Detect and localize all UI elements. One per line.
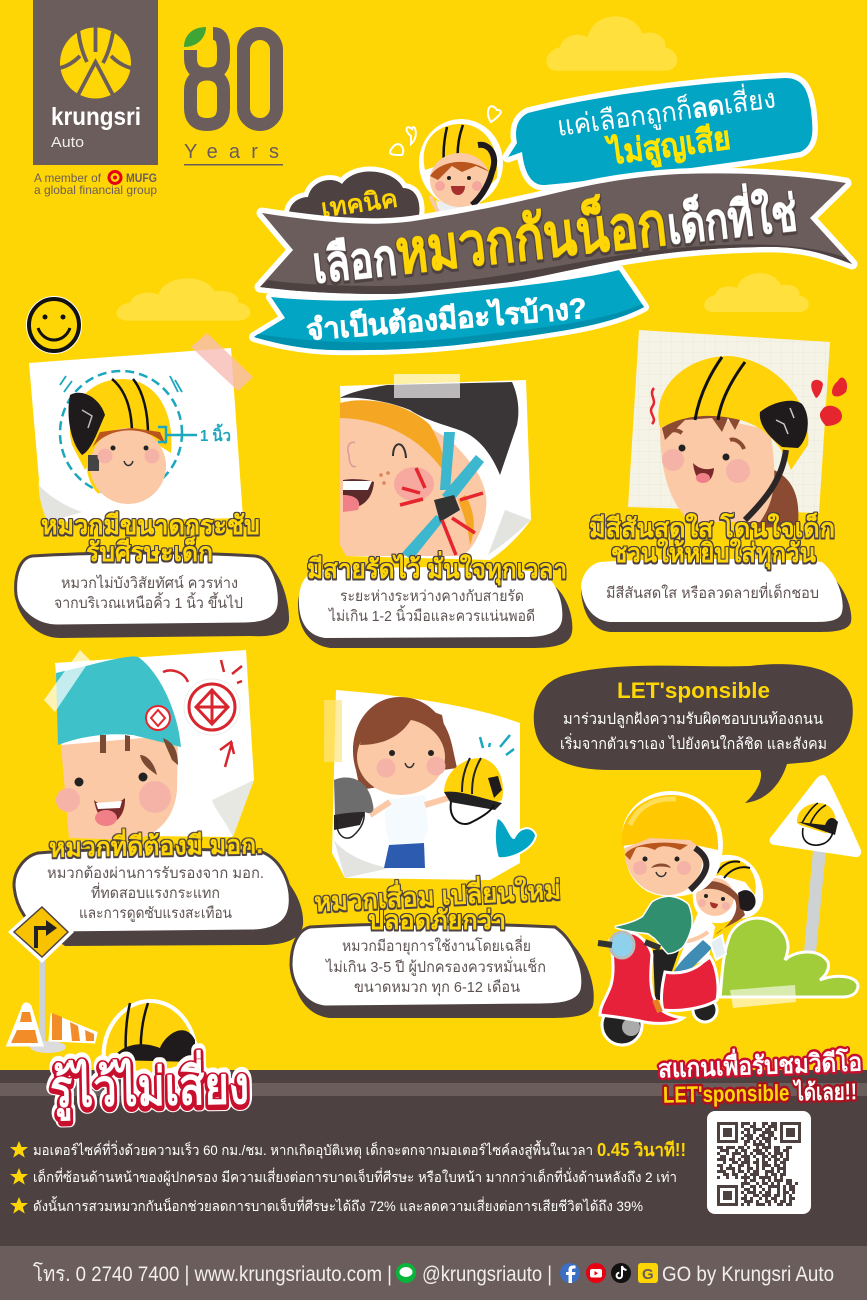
title ribbon: what is needed: จำเป็นต้องมีอะไรบ้าง? xyxy=(305,290,588,347)
title ribbon: what is needed xyxy=(254,270,644,350)
speech bubble: LET'sponsible: มาร่วมปลูกฝังความรับผิดชอบบนท้องถนน xyxy=(563,711,823,729)
logo: krungsri auto: krungsri xyxy=(51,103,141,131)
bush xyxy=(720,918,858,1008)
road sign: right turn xyxy=(8,901,74,1045)
illustration: parent and child on scooter xyxy=(598,791,763,1045)
heading xyxy=(313,871,562,935)
icon: smiley xyxy=(26,296,82,354)
heading: ชวนให้หยิบใส่ทุกวัน xyxy=(611,538,816,570)
text box with shadow: และการดูดซับแรงสะเทือน xyxy=(79,905,232,922)
bullet 2: เด็กที่ซ้อนด้านหน้าของผู้ปกครอง มีความเสี่ยงต่อการบาดเจ็บที่ศีรษะ หรือใบหน้า มากกว่าเด็กที่นั่งด้านหลังถึง 2 เท่า xyxy=(33,1168,677,1186)
text box with shadow xyxy=(291,924,594,1018)
heading: มีสายรัดไว้ มั่นใจทุกเวลา xyxy=(307,550,567,586)
illustration: paper with kid measuring helmet xyxy=(29,333,253,522)
logo: 80 years: Years xyxy=(184,141,279,163)
icon: helmet behind know-no-risk heading xyxy=(102,999,199,1090)
heading: รับศีรษะเด็ก xyxy=(86,536,213,567)
text box with shadow xyxy=(16,553,289,638)
text box with shadow xyxy=(581,559,851,632)
heading: ปลอดภัยกว่า xyxy=(368,905,506,935)
heading: scan to watch: LET'sponsible ได้เลย!! xyxy=(663,1077,857,1108)
illustration: paper with kid measuring helmet: 1 นิ้ว xyxy=(200,423,231,445)
heading: มีสีสันสดใส โดนใจเด็ก xyxy=(589,512,835,543)
icon: kid with helmet xyxy=(419,119,503,222)
text box with shadow: หมวกไม่บังวิสัยทัศน์ ควรห่าง xyxy=(61,574,238,592)
text box with shadow xyxy=(14,849,303,946)
icon: hearts xyxy=(390,106,501,155)
heading: know no risk: รู้ไว้ไม่เสี่ยง xyxy=(49,1051,250,1124)
icon: GO app xyxy=(638,1263,658,1283)
heading: หมวกที่ดีต้องมี มอก. xyxy=(49,825,263,863)
footer contact bar xyxy=(0,1246,867,1300)
panel: helmet fits the head xyxy=(16,333,289,638)
bottom dark band xyxy=(0,1070,867,1246)
title ribbon: choose the right kids helmet xyxy=(260,173,852,296)
heading: scan to watch xyxy=(657,1044,862,1108)
heading xyxy=(589,512,835,570)
text box with shadow: หมวกต้องผ่านการรับรองจาก มอก. xyxy=(47,865,264,882)
title ribbon: choose the right kids helmet: เลือก xyxy=(310,231,399,294)
heading: know no risk: รู้ไว้ไม่เสี่ยง xyxy=(49,1049,250,1122)
panel: strap always fastened xyxy=(298,374,572,648)
panel: bright colours xyxy=(581,330,851,632)
text box with shadow: ไม่เกิน 1-2 นิ้วมือและควรแน่นพอดี xyxy=(328,605,535,625)
parent figure xyxy=(615,791,723,1000)
road sign: triangle with helmet xyxy=(770,775,861,952)
text box with shadow: มีสีสันสดใส หรือลวดลายที่เด็กชอบ xyxy=(606,582,819,602)
bullet 1: 0.45 วินาที!! xyxy=(597,1140,686,1160)
text box with shadow: หมวกมีอายุการใช้งานโดยเฉลี่ย xyxy=(342,935,531,956)
heading: know no risk xyxy=(49,1049,250,1124)
icon: YouTube xyxy=(586,1263,606,1283)
text box with shadow: ระยะห่างระหว่างคางกับสายรัด xyxy=(340,588,524,605)
title ribbon: choose the right kids helmet: หมวกกันน็อก xyxy=(392,187,670,286)
logo: krungsri auto: a global financial group xyxy=(34,183,157,197)
text box with shadow: ไม่เกิน 3-5 ปี ผู้ปกครองควรหมั่นเช็ก xyxy=(325,956,546,976)
bullet 3: ดังนั้นการสวมหมวกกันน็อกช่วยลดการบาดเจ็บที่ศีรษะได้ถึง 72% และลดความเสี่ยงต่อการเสียชีวิตได้ถึง 39% xyxy=(33,1196,643,1214)
illustration: paper with kid and TIS badge xyxy=(44,650,254,840)
illustration: paper with woman holding helmets xyxy=(324,690,536,880)
heading: หมวกมีขนาดกระชับ xyxy=(41,510,260,540)
icon: GO app: G xyxy=(642,1266,654,1283)
icon: LINE xyxy=(396,1263,416,1283)
heading: หมวกเสื่อม เปลี่ยนใหม่ xyxy=(313,871,562,917)
QR code xyxy=(707,1111,811,1214)
text box with shadow xyxy=(298,567,572,648)
logo: 80 years xyxy=(184,27,283,166)
text box with shadow: ที่ทดสอบแรงกระแทก xyxy=(91,882,220,902)
logo: krungsri auto xyxy=(33,0,158,197)
footer contact bar: โทร. 0 2740 7400 | www.krungsriauto.com | xyxy=(33,1262,392,1286)
speech bubble: LET'sponsible: เริ่มจากตัวเราเอง ไปยังคนใกล้ชิด และสังคม xyxy=(560,733,827,753)
child figure xyxy=(673,855,763,978)
traffic cones xyxy=(8,1004,96,1053)
panel: replace worn helmet xyxy=(291,690,594,1018)
illustration: paper with strap close-up xyxy=(340,374,531,560)
illustration: paper with smiling kid xyxy=(628,330,847,530)
panel: TIS certified helmet xyxy=(14,650,303,946)
icon: Facebook xyxy=(560,1263,580,1283)
bullets: risk facts xyxy=(10,1140,686,1214)
text box with shadow: ขนาดหมวก ทุก 6-12 เดือน xyxy=(354,979,520,997)
clouds xyxy=(117,16,809,321)
bullet 1: มอเตอร์ไซค์ที่วิ่งด้วยความเร็ว 60 กม./ชม. หากเกิดอุบัติเหตุ เด็กจะตกจากมอเตอร์ไซค์ลงสู่พื้นในเวลา xyxy=(33,1140,593,1159)
icon: TikTok xyxy=(611,1263,631,1283)
heading bubble: choose right, reduce risk: ไม่สูญเสีย xyxy=(604,119,733,175)
heading: know no risk: รู้ไว้ไม่เสี่ยง xyxy=(49,1049,250,1122)
heading bubble: choose right, reduce risk xyxy=(508,78,812,185)
title ribbon: choose the right kids helmet: เด็กที่ใช่ xyxy=(664,178,800,254)
heading bubble: choose right, reduce risk: แค่เลือกถูกก็ลดเสี่ยง xyxy=(555,79,778,143)
speech bubble: LET'sponsible xyxy=(534,664,853,803)
footer contact bar: GO by Krungsri Auto xyxy=(662,1263,834,1286)
logo: krungsri auto: MUFG xyxy=(126,171,157,185)
title: technique cloud tag xyxy=(289,172,419,228)
text box with shadow: จากบริเวณเหนือคิ้ว 1 นิ้ว ขึ้นไป xyxy=(54,592,243,612)
logo: krungsri auto: Auto xyxy=(51,134,84,151)
footer contact bar: @krungsriauto | xyxy=(422,1263,552,1286)
heading xyxy=(41,510,260,567)
scooter xyxy=(598,932,718,1045)
speech bubble: LET'sponsible: LET'sponsible xyxy=(617,678,770,703)
title: technique cloud tag: เทคนิค xyxy=(319,185,399,223)
logo: krungsri auto: A member of xyxy=(34,171,102,185)
